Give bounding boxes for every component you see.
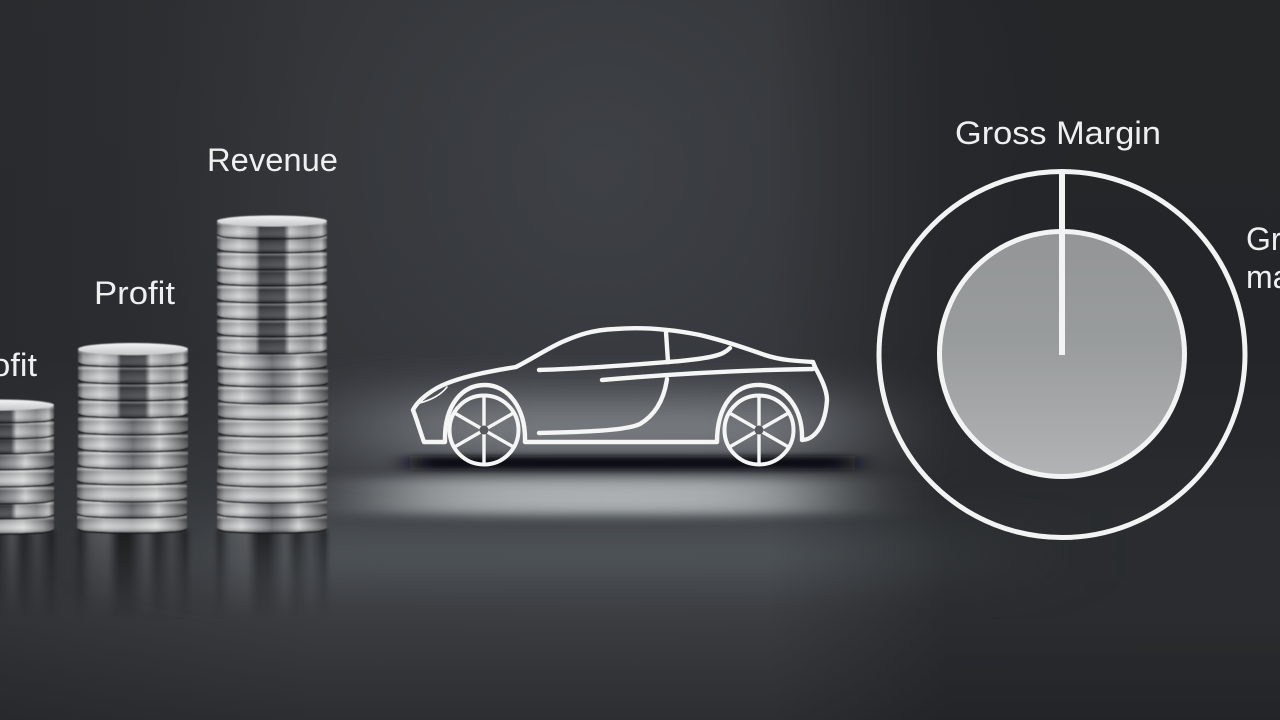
- coin stack: far-left profit: [0, 400, 54, 534]
- label: profit: Profit: [94, 275, 175, 311]
- car headlight: [420, 387, 447, 403]
- label: gross margin: Gross Margin: [955, 115, 1161, 151]
- car belt line: [602, 369, 813, 380]
- outer ring: [879, 172, 1245, 538]
- car window line: [539, 348, 730, 370]
- coin stack: profit: [77, 343, 188, 533]
- gross margin dial: [879, 172, 1245, 538]
- front wheel: [450, 396, 518, 464]
- car pillar: [666, 332, 668, 362]
- icon: car outline: [413, 328, 827, 464]
- needle: [1059, 172, 1065, 355]
- coin stack: revenue: [217, 216, 328, 533]
- car body: [413, 328, 827, 442]
- inner disc: [940, 232, 1184, 476]
- label: revenue: Revenue: [207, 142, 338, 178]
- label: clipped gross margin: [1246, 221, 1280, 295]
- rear wheel: [724, 396, 794, 464]
- car ground shadow: [410, 456, 855, 470]
- car door line: [539, 379, 667, 433]
- coin stack reflections: [0, 529, 330, 598]
